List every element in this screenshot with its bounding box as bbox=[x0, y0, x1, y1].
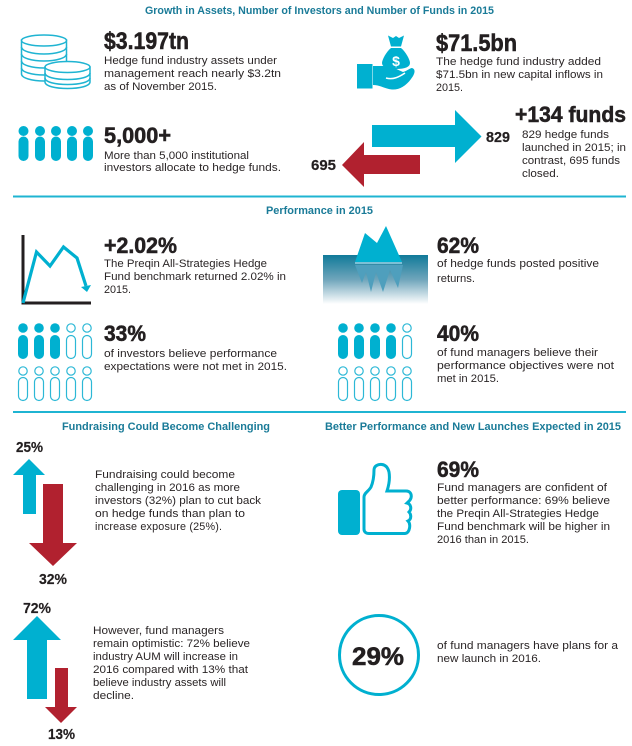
section: performance in 2015 bbox=[18, 205, 614, 400]
stat: +134 funds: launched in 2015; in bbox=[522, 142, 626, 154]
stat: 62%: of hedge funds posted positive bbox=[437, 258, 599, 270]
stat: $71.5bn bbox=[436, 30, 603, 94]
stat: 69%: the Preqin All-Strategies Hedge bbox=[437, 508, 599, 520]
stat: 69%: 69% bbox=[437, 457, 479, 482]
stat: 62% bbox=[437, 233, 599, 285]
stat: +134 funds: contrast, 695 funds bbox=[522, 155, 621, 167]
stat: 69% bbox=[437, 457, 610, 546]
text: optimistic managers bbox=[93, 625, 250, 702]
section heading: performance: Performance in 2015 bbox=[266, 205, 373, 217]
text: fundraising challenge: challenging in 2016 as more bbox=[95, 482, 240, 494]
stat: 40%: met in 2015. bbox=[437, 373, 499, 385]
label: 13%: 13% bbox=[48, 727, 75, 743]
stat: +134 funds bbox=[515, 102, 626, 180]
stat: 33%: 33% bbox=[104, 321, 146, 346]
text: fundraising challenge: on hedge funds than plan to bbox=[95, 508, 245, 520]
icon: iceberg bbox=[323, 226, 428, 304]
stat: 69%: Fund managers are confident of bbox=[437, 482, 608, 494]
stat: 33%: expectations were not met in 2015. bbox=[104, 361, 287, 373]
arrow: increase 25% bbox=[13, 459, 45, 514]
stat: $71.5bn: $71.5bn bbox=[436, 30, 517, 57]
stat: $71.5bn: 2015. bbox=[436, 82, 463, 94]
stat: 5,000+: investors allocate to hedge funds. bbox=[104, 162, 281, 174]
icon: 33% of people filled bbox=[18, 323, 92, 400]
text: new launch plans bbox=[437, 640, 618, 665]
text: fundraising challenge: increase exposure (25%). bbox=[95, 521, 222, 533]
stat: 33% bbox=[104, 321, 287, 373]
text: optimistic managers: believe industry assets will bbox=[93, 677, 226, 689]
stat: +134 funds: 829 hedge funds bbox=[522, 129, 610, 141]
icon: coin stacks bbox=[22, 35, 90, 88]
stat: 40%: 40% bbox=[437, 321, 479, 346]
text: new launch plans: new launch in 2016. bbox=[437, 653, 541, 665]
stat: 40%: of fund managers believe their bbox=[437, 347, 598, 359]
stat: $3.197tn: management reach nearly $3.2tn bbox=[104, 68, 281, 80]
icon: circle with 29%: 29% bbox=[352, 643, 404, 671]
stat: +2.02%: The Preqin All-Strategies Hedge bbox=[104, 258, 267, 270]
stat: 5,000+: More than 5,000 institutional bbox=[104, 150, 249, 162]
label: 32%: 32% bbox=[39, 572, 67, 588]
text: fundraising challenge: Fundraising could become bbox=[95, 469, 235, 481]
label: 829: 829 bbox=[486, 130, 510, 146]
section heading: growth: Growth in Assets, Number of Investors and Number of Funds in 2015 bbox=[145, 5, 494, 17]
stat: +2.02%: +2.02% bbox=[104, 233, 177, 258]
section heading: fundraising: Fundraising Could Become Challenging bbox=[62, 421, 270, 433]
text: optimistic managers: However, fund managers bbox=[93, 625, 225, 637]
stat: 40%: performance objectives were not bbox=[437, 360, 614, 372]
icon: thumbs up bbox=[338, 464, 411, 535]
arrow: decline 13% bbox=[45, 668, 77, 723]
icon: five investors bbox=[18, 126, 93, 161]
stat: 69%: Fund benchmark will be higher in bbox=[437, 521, 610, 533]
stat: +134 funds: closed. bbox=[522, 168, 559, 180]
arrow: funds closed bbox=[342, 142, 420, 187]
stat: $71.5bn: $71.5bn in new capital inflows in bbox=[436, 69, 603, 81]
arrow: funds launched bbox=[372, 110, 482, 163]
stat: 5,000+ bbox=[104, 123, 281, 174]
stat: $3.197tn: $3.197tn bbox=[104, 28, 189, 55]
arrow: cut back 32% bbox=[29, 484, 77, 566]
stat: 33%: of investors believe performance bbox=[104, 348, 277, 360]
stat: 62%: 62% bbox=[437, 233, 479, 258]
stat: 69%: better performance: 69% believe bbox=[437, 495, 610, 507]
panel: better performance and new launches bbox=[325, 421, 621, 694]
stat: +2.02% bbox=[104, 233, 286, 296]
stat: $3.197tn bbox=[104, 28, 281, 93]
text: fundraising challenge bbox=[95, 469, 262, 533]
label: 25%: 25% bbox=[16, 440, 43, 456]
text: fundraising challenge: investors (32%) plan to cut back bbox=[95, 495, 262, 507]
stat: $3.197tn: Hedge fund industry assets under bbox=[104, 55, 277, 67]
icon: hand holding money bag: $ bbox=[392, 53, 400, 69]
icon: line chart bbox=[23, 235, 91, 303]
stat: $71.5bn: The hedge fund industry added bbox=[436, 56, 601, 68]
icon: 40% of people filled bbox=[338, 323, 412, 400]
stat: +134 funds: +134 funds bbox=[515, 102, 626, 127]
text: new launch plans: of fund managers have plans for a bbox=[437, 640, 618, 652]
stat: 62%: returns. bbox=[437, 273, 475, 285]
stat: +2.02%: 2015. bbox=[104, 284, 131, 296]
icon: hand holding money bag bbox=[357, 36, 415, 90]
stat: $3.197tn: as of November 2015. bbox=[104, 81, 217, 93]
panel: fundraising could become challenging bbox=[13, 421, 270, 743]
text: optimistic managers: 2016 compared with 13% that bbox=[93, 664, 248, 676]
stat: 5,000+: 5,000+ bbox=[104, 123, 171, 148]
icon: circle with 29% bbox=[340, 616, 418, 694]
section heading: better performance: Better Performance and New Launches Expected in 2015 bbox=[325, 421, 621, 433]
stat: 40% bbox=[437, 321, 614, 385]
arrow: increase 72% bbox=[13, 616, 61, 699]
label: 695: 695 bbox=[311, 158, 336, 174]
section: growth in assets, investors and funds bbox=[18, 5, 626, 187]
text: optimistic managers: industry AUM will increase in bbox=[93, 651, 238, 663]
text: optimistic managers: decline. bbox=[93, 690, 134, 702]
stat: 69%: 2016 than in 2015. bbox=[437, 534, 529, 546]
text: optimistic managers: remain optimistic: 72% believe bbox=[93, 638, 250, 650]
stat: +2.02%: Fund benchmark returned 2.02% in bbox=[104, 271, 286, 283]
label: 72%: 72% bbox=[23, 601, 51, 617]
